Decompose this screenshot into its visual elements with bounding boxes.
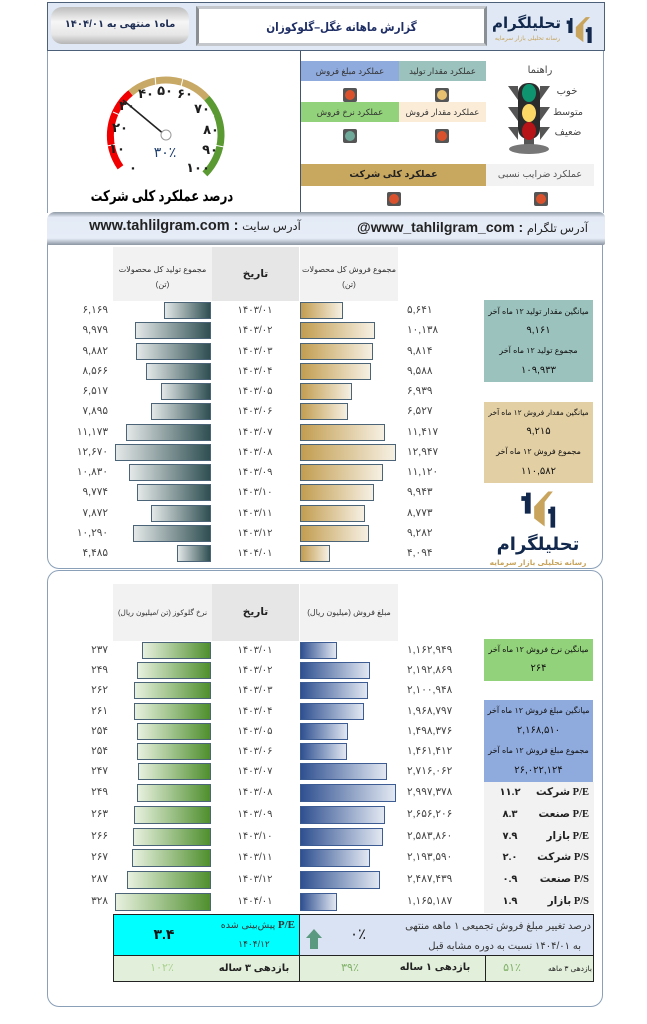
row 1404/01: ۳۲۸: [91, 895, 108, 907]
row 1403/04: [91, 703, 452, 720]
row 1403/07: ۱۴۰۳/۰۷: [237, 426, 272, 438]
row 1403/03: ۲,۱۰۰,۹۴۸: [407, 684, 452, 696]
row 1403/08: ۱۲,۹۴۷: [407, 446, 438, 458]
row 1403/10: ۹,۷۷۴: [83, 486, 108, 498]
gauge chart: ۱۰: [109, 142, 125, 157]
signal: overall: [387, 192, 401, 206]
ratio: market P/S: P/S بازار: [548, 896, 589, 907]
gauge chart: ۷۰: [194, 102, 210, 117]
address bar: [47, 212, 605, 245]
ratio: company P/E: [499, 787, 589, 798]
row 1403/04: [82, 363, 432, 380]
scorecard: sales value: عملکرد مبلغ فروش: [316, 66, 384, 76]
report title box: گزارش ماهانه غگل–گلوکوزان: [266, 20, 417, 34]
row 1403/06: ۷,۸۹۵: [83, 405, 108, 417]
row 1404/01: ۱,۱۶۵,۱۸۷: [407, 895, 452, 907]
row 1403/05: ۶,۵۱۷: [83, 385, 108, 397]
ratio: company P/E: P/E شرکت: [536, 787, 589, 798]
row 1403/04: ۹,۵۸۸: [407, 365, 432, 377]
row 1403/08: ۱۲,۶۷۰: [77, 446, 108, 458]
panel: overview frame: [47, 51, 604, 213]
row 1403/09: ۱۴۰۳/۰۹: [237, 809, 272, 820]
3 year return value: ۱۰۲٪: [150, 962, 174, 974]
row 1403/01: [83, 302, 432, 319]
change description line 2: به ۱۴۰۴/۰۱ نسبت به دوره مشابه قبل: [428, 941, 581, 952]
average rate label: میانگین نرخ فروش ۱۲ ماه آخر: [488, 645, 589, 654]
scorecard: sales volume: عملکرد مقدار فروش: [406, 107, 479, 117]
row 1403/09: [77, 464, 438, 481]
logo mark: [566, 17, 592, 43]
month pill: ماه۱ منتهی به ۱۴۰۴/۰۱: [65, 19, 175, 30]
row 1403/05: ۱۴۰۳/۰۵: [237, 726, 272, 737]
gauge chart: ۳۰٪: [154, 145, 176, 161]
row 1403/12: ۱۴۰۳/۱۲: [237, 874, 272, 885]
change description line 1: درصد تغییر مبلغ فروش تجمیعی ۱ ماهه منتهی: [405, 921, 591, 932]
average rate value: ۲۶۴: [530, 663, 547, 674]
row 1404/01: ۱۴۰۴/۰۱: [237, 548, 272, 559]
total sales value label: مجموع مبلغ فروش ۱۲ ماه آخر: [488, 746, 589, 755]
header logo: [492, 14, 592, 43]
forecast P/E cell: [113, 914, 300, 956]
row 1403/12: ۱۰,۲۹۰: [77, 527, 108, 539]
1 year return value: ۳۹٪: [341, 962, 359, 974]
column header: production: (تن): [156, 280, 169, 289]
row 1403/11: ۱۴۰۳/۱۱: [237, 508, 272, 518]
row 1404/01: ۱۴۰۴/۰۱: [237, 896, 272, 907]
gauge chart: [106, 76, 224, 176]
forecast P/E value: ۳.۴: [154, 926, 174, 942]
row 1403/04: ۱۴۰۳/۰۴: [237, 706, 272, 717]
3 year return label: بازدهی ۳ ساله: [219, 963, 289, 974]
row 1403/06: ۱,۴۶۱,۴۱۲: [407, 745, 452, 757]
row 1403/09: [91, 806, 452, 824]
column header: sales: مجموع فروش کل محصولات: [302, 265, 396, 274]
row 1404/01: [91, 893, 452, 911]
row 1403/04: ۲۶۱: [91, 705, 108, 717]
ratio: industry P/S: P/S صنعت: [540, 874, 589, 885]
row 1403/03: ۹,۸۱۴: [407, 344, 432, 356]
row 1403/01: ۶,۱۶۹: [83, 304, 108, 316]
row 1403/12: [91, 871, 452, 889]
signal: sales value: [343, 88, 357, 102]
row 1403/01: [91, 642, 452, 659]
change percent: ۰٪: [350, 926, 366, 943]
row 1403/09: ۲۶۳: [91, 808, 108, 820]
3 year return cell: [113, 955, 300, 982]
row 1404/01: [83, 545, 432, 562]
row 1403/07: ۱۴۰۳/۰۷: [237, 766, 272, 777]
gauge chart: ۳۰: [119, 99, 135, 114]
signal: ratios: [534, 192, 548, 206]
ratio: industry P/S: [502, 874, 589, 885]
logo mark: [521, 492, 556, 528]
row 1403/12: ۲,۴۸۷,۴۳۹: [407, 873, 452, 885]
row 1403/06: ۲۵۴: [91, 745, 108, 757]
row 1403/04: ۱۴۰۳/۰۴: [237, 366, 272, 377]
column header: sales: [300, 247, 398, 301]
row 1403/01: ۲۳۷: [91, 644, 108, 656]
signal: sales rate: [343, 129, 357, 143]
gauge chart: ۲۰: [112, 121, 128, 136]
row 1403/10: [91, 828, 452, 846]
row 1403/07: ۲۴۷: [91, 765, 108, 777]
column header: sales value: [300, 584, 398, 641]
legend: good: خوب: [557, 86, 577, 97]
ratio: market P/S: ۱.۹: [502, 896, 518, 907]
row 1403/07: [91, 763, 452, 780]
row 1403/09: ۱۰,۸۳۰: [77, 466, 108, 478]
legend title: راهنما: [528, 65, 552, 76]
row 1403/10: ۹,۹۴۳: [407, 486, 432, 498]
column header: sales value: مبلغ فروش (میلیون ریال): [307, 608, 391, 617]
row 1403/10: ۲,۵۸۳,۸۶۰: [407, 830, 452, 842]
forecast P/E label: P/E پیش‌بینی شده: [221, 919, 295, 931]
row 1403/06: [91, 743, 452, 760]
scorecard: sales volume: [399, 102, 486, 122]
row 1403/02: ۲,۱۹۲,۸۶۹: [407, 664, 452, 676]
gauge chart: ۴۰: [138, 87, 154, 102]
row 1403/09: ۱۱,۱۲۰: [407, 466, 438, 478]
row 1403/08: ۱۴۰۳/۰۸: [237, 787, 272, 798]
row 1403/11: [91, 849, 452, 867]
overall performance bar: [301, 164, 486, 186]
column header: date: [212, 584, 299, 641]
row 1403/11: [82, 505, 432, 522]
header band: [47, 2, 605, 51]
large logo: [490, 492, 586, 567]
average production value: ۹,۱۶۱: [526, 325, 551, 336]
gauge chart: ۸۰: [203, 123, 219, 138]
gauge chart: ۶۰: [177, 87, 193, 102]
row 1403/01: ۵,۶۴۱: [407, 304, 432, 316]
gauge caption: درصد عملکرد کلی شرکت: [91, 188, 233, 205]
scorecard: production volume: عملکرد مقدار تولید: [409, 66, 476, 76]
row 1403/08: ۲۴۹: [91, 786, 108, 798]
ratio: market P/S: [502, 896, 589, 907]
gauge chart: ۰: [129, 161, 137, 176]
3 month return cell: [485, 955, 594, 982]
1 year return cell: [299, 955, 486, 982]
row 1403/02: ۱۴۰۳/۰۲: [237, 325, 272, 336]
total production label: مجموع تولید ۱۲ ماه آخر: [499, 346, 578, 355]
sales change cell: [299, 914, 594, 956]
ratio: company P/S: P/S شرکت: [537, 852, 589, 863]
legend: medium: متوسط: [553, 107, 583, 118]
row 1403/02: ۱۴۰۳/۰۲: [237, 665, 272, 676]
row 1403/12: [77, 525, 432, 542]
row 1403/05: ۲۵۴: [91, 725, 108, 737]
row 1403/08: [91, 784, 452, 802]
ratios table: [484, 782, 594, 913]
logo tagline: رسانه تحلیلی بازار سرمایه: [490, 558, 586, 567]
ratio: industry P/E: P/E صنعت: [539, 809, 589, 820]
row 1403/07: ۱۱,۱۷۳: [77, 426, 108, 438]
row 1403/03: ۹,۸۸۲: [83, 344, 108, 356]
column header: date: تاریخ: [243, 268, 268, 280]
3 month return label: بازدهی ۳ ماهه: [548, 964, 592, 973]
summary box: sales: [484, 402, 593, 483]
row 1403/06: [82, 403, 432, 420]
row 1403/01: ۱,۱۶۲,۹۴۹: [407, 644, 452, 656]
relative ratios label: [486, 164, 594, 186]
row 1403/11: ۷,۸۷۲: [83, 506, 108, 518]
total production value: ۱۰۹,۹۳۳: [521, 365, 556, 376]
total sales label: مجموع فروش ۱۲ ماه آخر: [496, 447, 581, 456]
total sales value: ۲۶,۰۲۲,۱۲۴: [514, 765, 563, 776]
summary box: rate: [484, 639, 593, 681]
row 1403/04: ۱,۹۶۸,۷۹۷: [407, 705, 452, 717]
row 1403/11: ۸,۷۷۳: [407, 506, 432, 518]
column header: date: تاریخ: [243, 606, 268, 618]
ratio: market P/E: P/E بازار: [546, 831, 589, 842]
summary box: production: [484, 300, 593, 382]
row 1403/07: [77, 424, 438, 441]
month pill: [51, 7, 189, 44]
average production label: میانگین مقدار تولید ۱۲ ماه آخر: [488, 307, 589, 316]
column header: production: [113, 247, 212, 301]
logo wordmark: تحلیلگرام: [497, 534, 579, 554]
row 1403/10: ۲۶۶: [91, 830, 108, 842]
row 1403/02: ۲۴۹: [91, 664, 108, 676]
row 1403/03: [83, 343, 432, 360]
row 1403/05: [91, 723, 452, 740]
row 1404/01: ۴,۰۹۴: [407, 547, 432, 559]
row 1403/06: ۱۴۰۳/۰۶: [237, 406, 272, 417]
panel: sales value and rate: [47, 570, 603, 1007]
row 1403/02: ۹,۹۷۹: [83, 324, 108, 336]
column header: sales: (تن): [342, 280, 356, 289]
row 1403/04: ۸,۵۶۶: [83, 365, 108, 377]
row 1403/02: ۱۰,۱۳۸: [407, 324, 438, 336]
row 1404/01: ۴,۴۸۵: [83, 547, 108, 559]
average sales value: ۹,۲۱۵: [526, 426, 551, 437]
ratio: company P/S: [502, 852, 589, 863]
ratio: industry P/E: ۸.۳: [502, 809, 518, 820]
row 1403/07: ۱۱,۴۱۷: [407, 426, 438, 438]
row 1403/11: ۱۴۰۳/۱۱: [237, 852, 272, 863]
signal: production volume: [435, 88, 449, 102]
row 1403/10: ۱۴۰۳/۱۰: [237, 831, 272, 842]
overall performance bar: عملکرد کلی شرکت: [349, 169, 438, 180]
1 year return label: بازدهی ۱ ساله: [400, 962, 470, 973]
legend: weak: ضعیف: [555, 127, 581, 138]
gauge chart: ۹۰: [202, 143, 218, 158]
telegram address: @www_tahlilgram_com : آدرس تلگرام: [357, 219, 588, 235]
row 1403/01: ۱۴۰۳/۰۱: [237, 645, 272, 656]
row 1403/05: ۶,۹۳۹: [407, 385, 432, 397]
gauge chart: ۵۰: [157, 84, 173, 99]
row 1403/02: [83, 322, 438, 339]
column header: date: [212, 247, 299, 301]
ratio: company P/S: ۲.۰: [502, 852, 518, 863]
scorecard: sales rate: عملکرد نرخ فروش: [317, 107, 383, 117]
row 1403/12: ۹,۲۸۲: [407, 527, 432, 539]
row 1403/05: ۱,۴۹۸,۳۷۶: [407, 725, 452, 737]
row 1403/12: ۲۸۷: [91, 873, 108, 885]
row 1403/05: ۱۴۰۳/۰۵: [237, 386, 272, 397]
website address: www.tahlilgram.com : آدرس سایت: [89, 218, 301, 234]
forecast date: ۱۴۰۴/۱۲: [238, 939, 270, 949]
logo wordmark: تحلیلگرام: [492, 15, 561, 32]
row 1403/03: ۱۴۰۳/۰۳: [237, 346, 272, 356]
row 1403/01: ۱۴۰۳/۰۱: [237, 305, 272, 316]
row 1403/03: [91, 682, 452, 699]
ratio: market P/E: ۷.۹: [502, 831, 518, 842]
row 1403/09: ۱۴۰۳/۰۹: [237, 467, 272, 478]
total sales value: ۱۱۰,۵۸۲: [521, 466, 556, 477]
report title box: [196, 6, 487, 46]
logo tagline: رسانه تحلیلی بازار سرمایه: [495, 36, 560, 42]
column header: production: مجموع تولید کل محصولات: [119, 265, 206, 274]
panel: production and sales volume: [47, 236, 603, 569]
icon: traffic light: [508, 83, 550, 154]
row 1403/11: ۲,۱۹۳,۵۹۰: [407, 851, 452, 863]
row 1403/05: [83, 383, 432, 400]
scorecard: sales value: [301, 61, 399, 81]
row 1403/06: ۶,۵۲۷: [407, 405, 432, 417]
row 1403/02: [91, 662, 452, 679]
ratio: industry P/S: ۰.۹: [502, 874, 518, 885]
average sales value label: میانگین مبلغ فروش ۱۲ ماه آخر: [488, 706, 589, 715]
row 1403/09: ۲,۶۵۶,۲۰۶: [407, 808, 452, 820]
scorecard: sales rate: [301, 102, 399, 122]
signal: sales volume: [435, 129, 449, 143]
row 1403/10: ۱۴۰۳/۱۰: [237, 487, 272, 498]
ratio: industry P/E: [502, 809, 589, 820]
divider between gauge and scorecards: [300, 51, 301, 212]
ratio: company P/E: ۱۱.۲: [499, 787, 521, 798]
column header: rate: نرخ گلوکوز (تن /میلیون ریال): [118, 608, 207, 617]
row 1403/03: ۱۴۰۳/۰۳: [237, 685, 272, 696]
row 1403/07: ۲,۷۱۶,۰۶۲: [407, 765, 452, 777]
relative ratios label: عملکرد ضرایب نسبی: [498, 169, 582, 180]
gauge chart: ۱۰۰: [186, 161, 210, 176]
row 1403/08: ۱۴۰۳/۰۸: [237, 447, 272, 458]
3 month return value: ۵۱٪: [503, 962, 521, 974]
average sales label: میانگین مقدار فروش ۱۲ ماه آخر: [488, 408, 589, 417]
row 1403/10: [83, 484, 432, 501]
ratio: market P/E: [502, 831, 589, 842]
row 1403/12: ۱۴۰۳/۱۲: [237, 528, 272, 539]
scorecard: production volume: [399, 61, 486, 81]
row 1403/08: ۲,۹۹۷,۳۷۸: [407, 786, 452, 798]
row 1403/11: ۲۶۷: [91, 851, 108, 863]
icon: up arrow: [305, 929, 323, 949]
row 1403/06: ۱۴۰۳/۰۶: [237, 746, 272, 757]
summary box: sales value: [484, 700, 593, 782]
row 1403/08: [77, 444, 438, 461]
row 1403/03: ۲۶۲: [91, 684, 108, 696]
column header: rate: [113, 584, 212, 641]
average sales value: ۲,۱۶۸,۵۱۰: [517, 725, 560, 736]
